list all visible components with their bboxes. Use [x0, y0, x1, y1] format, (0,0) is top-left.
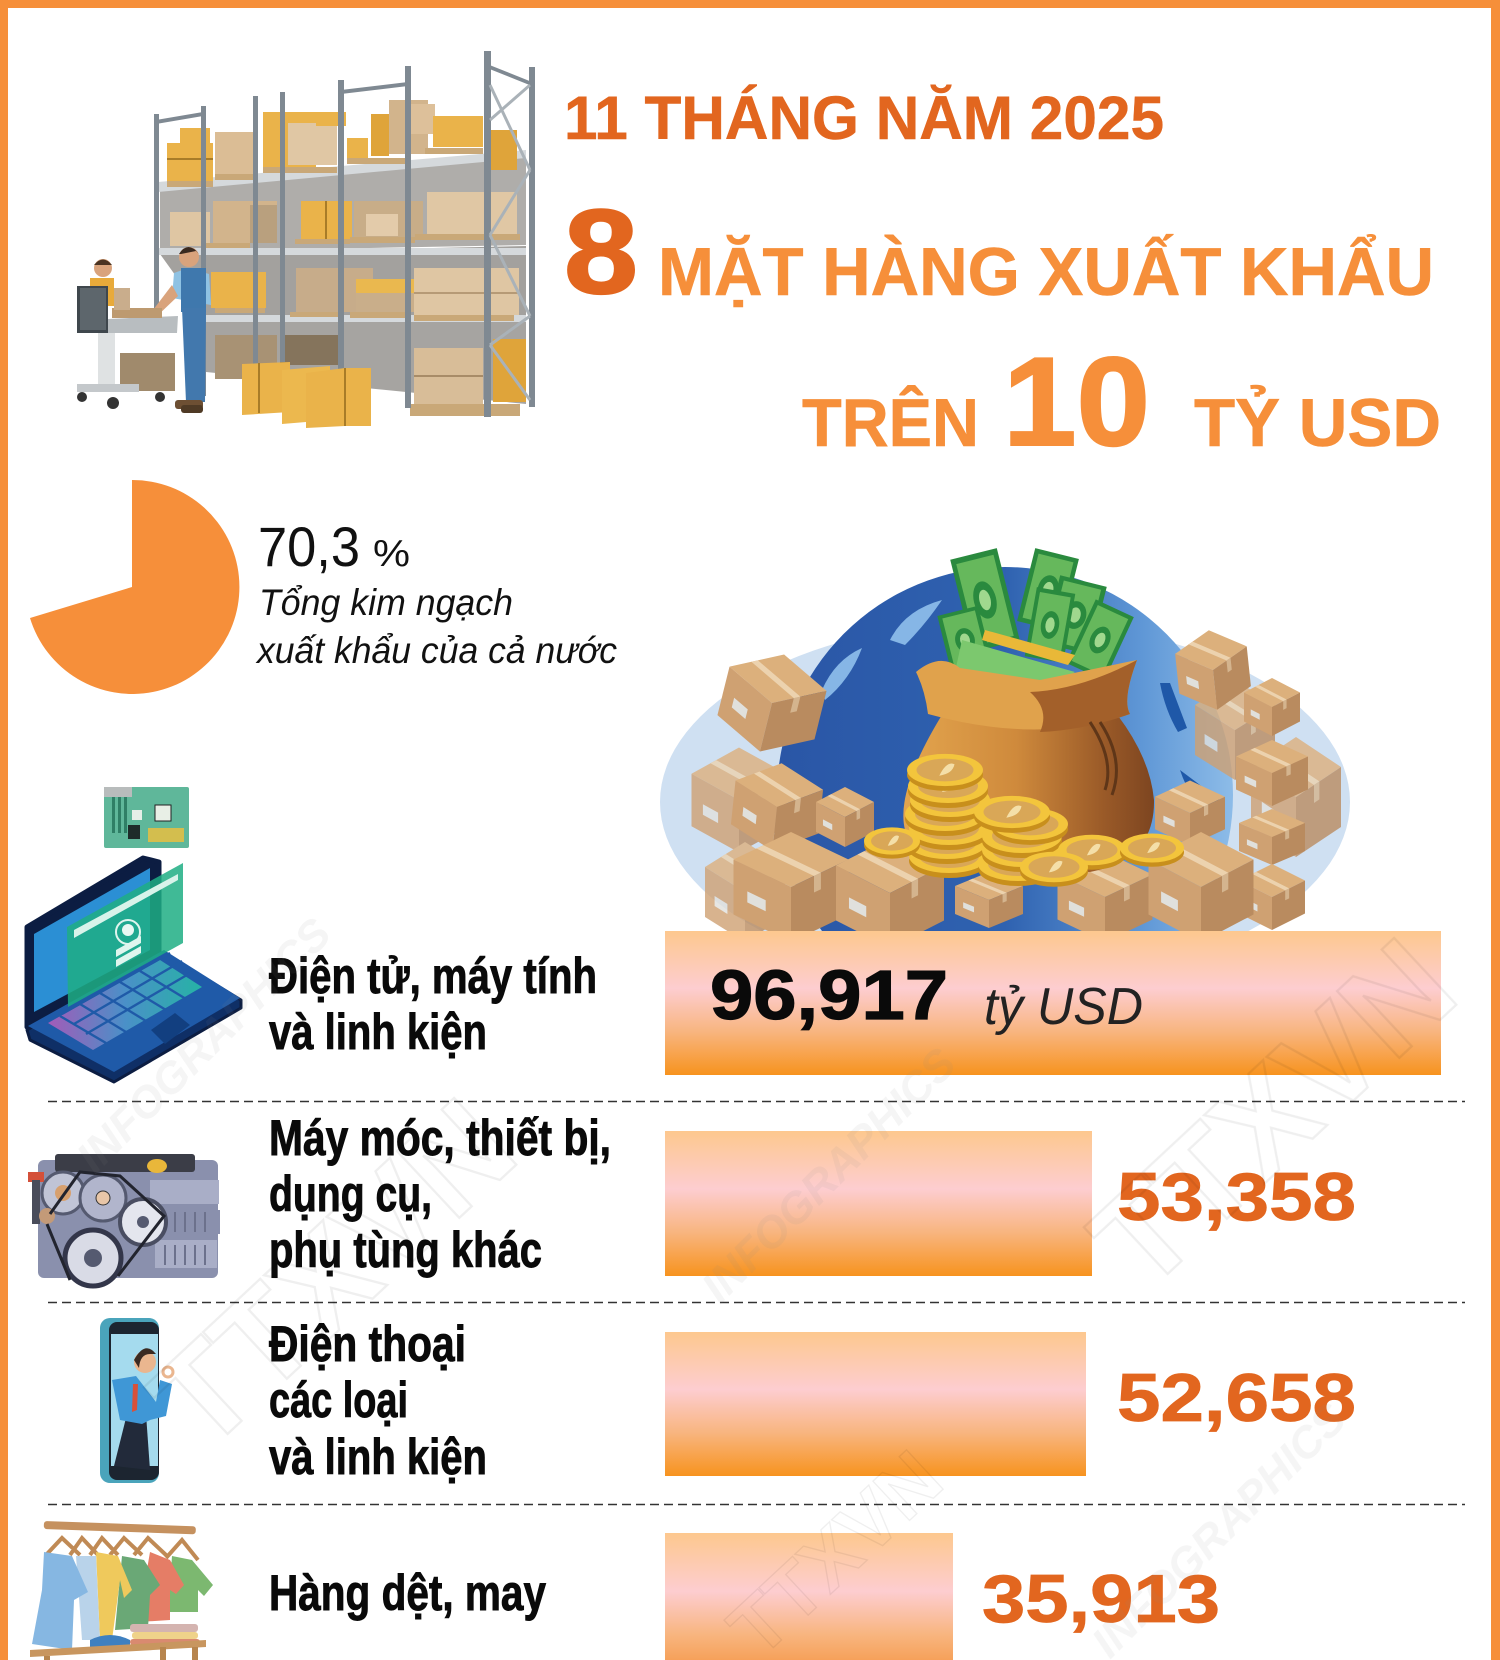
value 53,358: 53,358: [1117, 1159, 1356, 1235]
bar 3: phones: [665, 1332, 1086, 1476]
yellow boxes on the floor: [242, 362, 371, 428]
label: phones: Điện thoại: [269, 1316, 466, 1372]
pie caption: xuất khẩu của cả nước: [255, 630, 617, 671]
label: electronics: và linh kiện: [269, 1004, 487, 1060]
icon: circuit board: [104, 787, 189, 848]
title line: trên 10 tỷ USD: TỶ USD: [1194, 384, 1441, 461]
label: machinery: phụ tùng khác: [269, 1222, 542, 1278]
bar 2: machinery: [665, 1131, 1092, 1276]
worker in blue apron: [150, 247, 211, 413]
globe: [778, 567, 1233, 931]
value 52,658: 52,658: [1117, 1360, 1356, 1436]
icon: engine: [28, 1154, 220, 1286]
money bag: [903, 660, 1154, 872]
rack shelves: [158, 150, 526, 404]
bar 4: textiles: [665, 1533, 953, 1660]
bar 1: electronics: [665, 931, 1441, 1075]
icon: smartphone with man: [100, 1318, 173, 1483]
value 35,913: 35,913: [982, 1561, 1220, 1637]
icon: clothes rack: [30, 1521, 213, 1660]
label: machinery: Máy móc, thiết bị,: [269, 1110, 611, 1166]
label: textiles: Hàng dệt, may: [269, 1565, 546, 1621]
value 96,917: 96,917: [710, 956, 948, 1034]
pie caption: 70,3: [258, 515, 360, 578]
rack uprights and bracing: [154, 51, 535, 417]
watermark: TTXVN and Infographics: [67, 909, 1483, 1660]
title line: trên 10 tỷ USD: [802, 331, 1441, 472]
seated worker and computer cart: [77, 259, 178, 409]
label: electronics: [269, 948, 597, 1060]
label: phones: [269, 1316, 487, 1485]
pie caption: [255, 515, 617, 671]
watermark: TTXVN and Infographics: INFOGRAPHICS: [1082, 1394, 1356, 1660]
label: phones: và linh kiện: [269, 1429, 487, 1485]
pallets: [167, 148, 520, 416]
label: machinery: dụng cụ,: [269, 1166, 432, 1222]
stacked cartons and yellow boxes: [167, 100, 526, 404]
pie caption: Tổng kim ngạch: [259, 582, 513, 623]
unit: tỷ USD: tỷ USD: [984, 978, 1143, 1036]
label: phones: các loại: [269, 1372, 408, 1428]
label: electronics: Điện tử, máy tính: [269, 948, 597, 1004]
label: machinery: [269, 1110, 611, 1278]
parcels: [711, 626, 1308, 948]
banknotes: [937, 548, 1134, 695]
watermark: TTXVN and Infographics: INFOGRAPHICS: [67, 909, 341, 1182]
title number 8: 8: [564, 185, 638, 319]
parcels behind: [692, 680, 1341, 942]
title line: trên 10 tỷ USD: 10: [1003, 331, 1150, 472]
title line: 11 tháng năm 2025: 11 THÁNG NĂM 2025: [564, 84, 1164, 152]
illustration: globe, money bag and parcels: [660, 548, 1350, 931]
pie caption: %: [373, 533, 410, 575]
watermark: TTXVN and Infographics: INFOGRAPHICS: [692, 1039, 966, 1312]
title line: mặt hàng xuất khẩu: MẶT HÀNG XUẤT KHẨU: [658, 233, 1434, 310]
icon: laptop: [27, 858, 241, 1082]
coin stacks: [864, 754, 1184, 887]
illustration: warehouse shelves with workers: [77, 51, 535, 428]
title line: trên 10 tỷ USD: TRÊN: [802, 384, 979, 461]
pie chart: 70.3 percent: [30, 480, 239, 694]
pale halo ellipse: [660, 644, 1350, 931]
